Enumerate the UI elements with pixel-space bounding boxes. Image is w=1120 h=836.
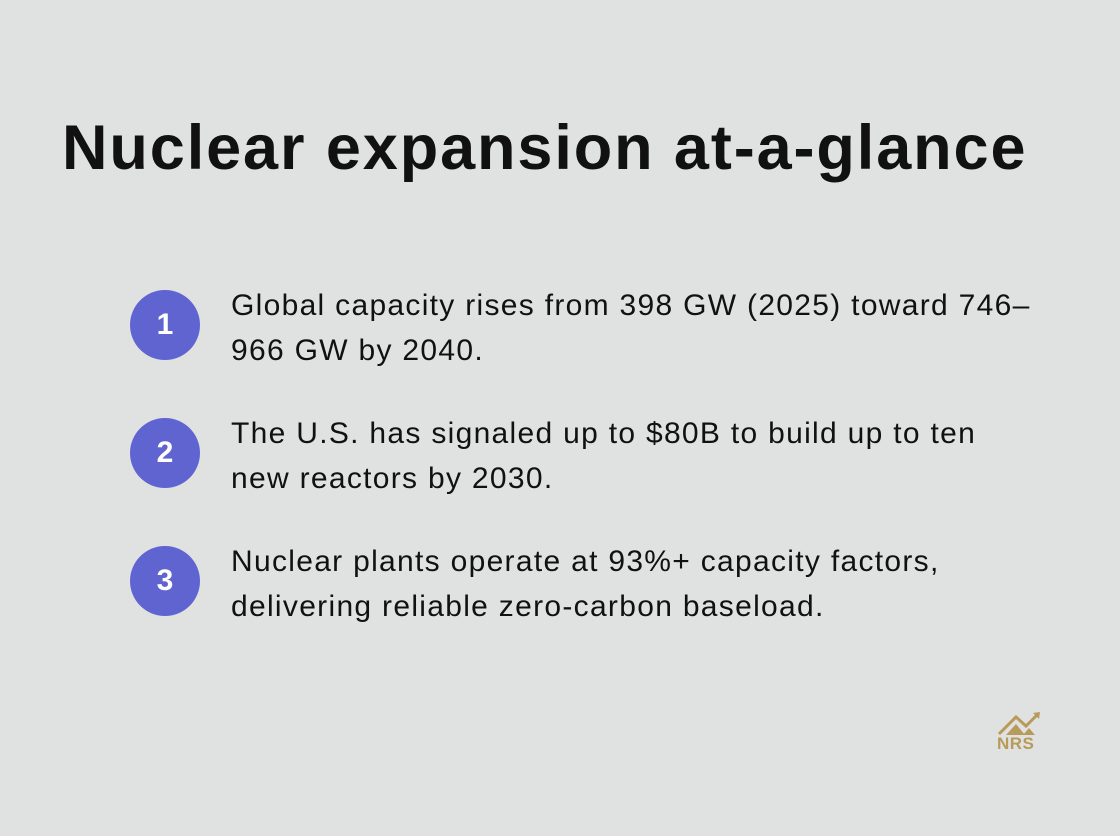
- logo: NRS: NRS: [997, 734, 1034, 753]
- text 1: Global capacity rises from 398 GW (2025) toward 746–: [231, 289, 1031, 322]
- text 2: [231, 417, 976, 495]
- text 3: [231, 545, 940, 623]
- badge 2: 2: [157, 436, 173, 469]
- badge 2: [130, 418, 200, 488]
- title: Nuclear expansion at-a-glance: [62, 113, 1027, 183]
- text 2: new reactors by 2030.: [231, 462, 553, 495]
- text 2: The U.S. has signaled up to $80B to build up to ten: [231, 417, 976, 450]
- badge 1: 1: [157, 308, 173, 341]
- text 3: Nuclear plants operate at 93%+ capacity factors,: [231, 545, 940, 578]
- text 1: 966 GW by 2040.: [231, 334, 484, 367]
- text 1: [231, 289, 1031, 367]
- badge 3: [130, 546, 200, 616]
- logo: NRS: [997, 712, 1040, 753]
- item 1: [130, 289, 1031, 367]
- badge 3: 3: [157, 564, 173, 597]
- item 2: [130, 417, 976, 495]
- text 3: delivering reliable zero-carbon baseload.: [231, 590, 825, 623]
- item 3: [130, 545, 940, 623]
- badge 1: [130, 290, 200, 360]
